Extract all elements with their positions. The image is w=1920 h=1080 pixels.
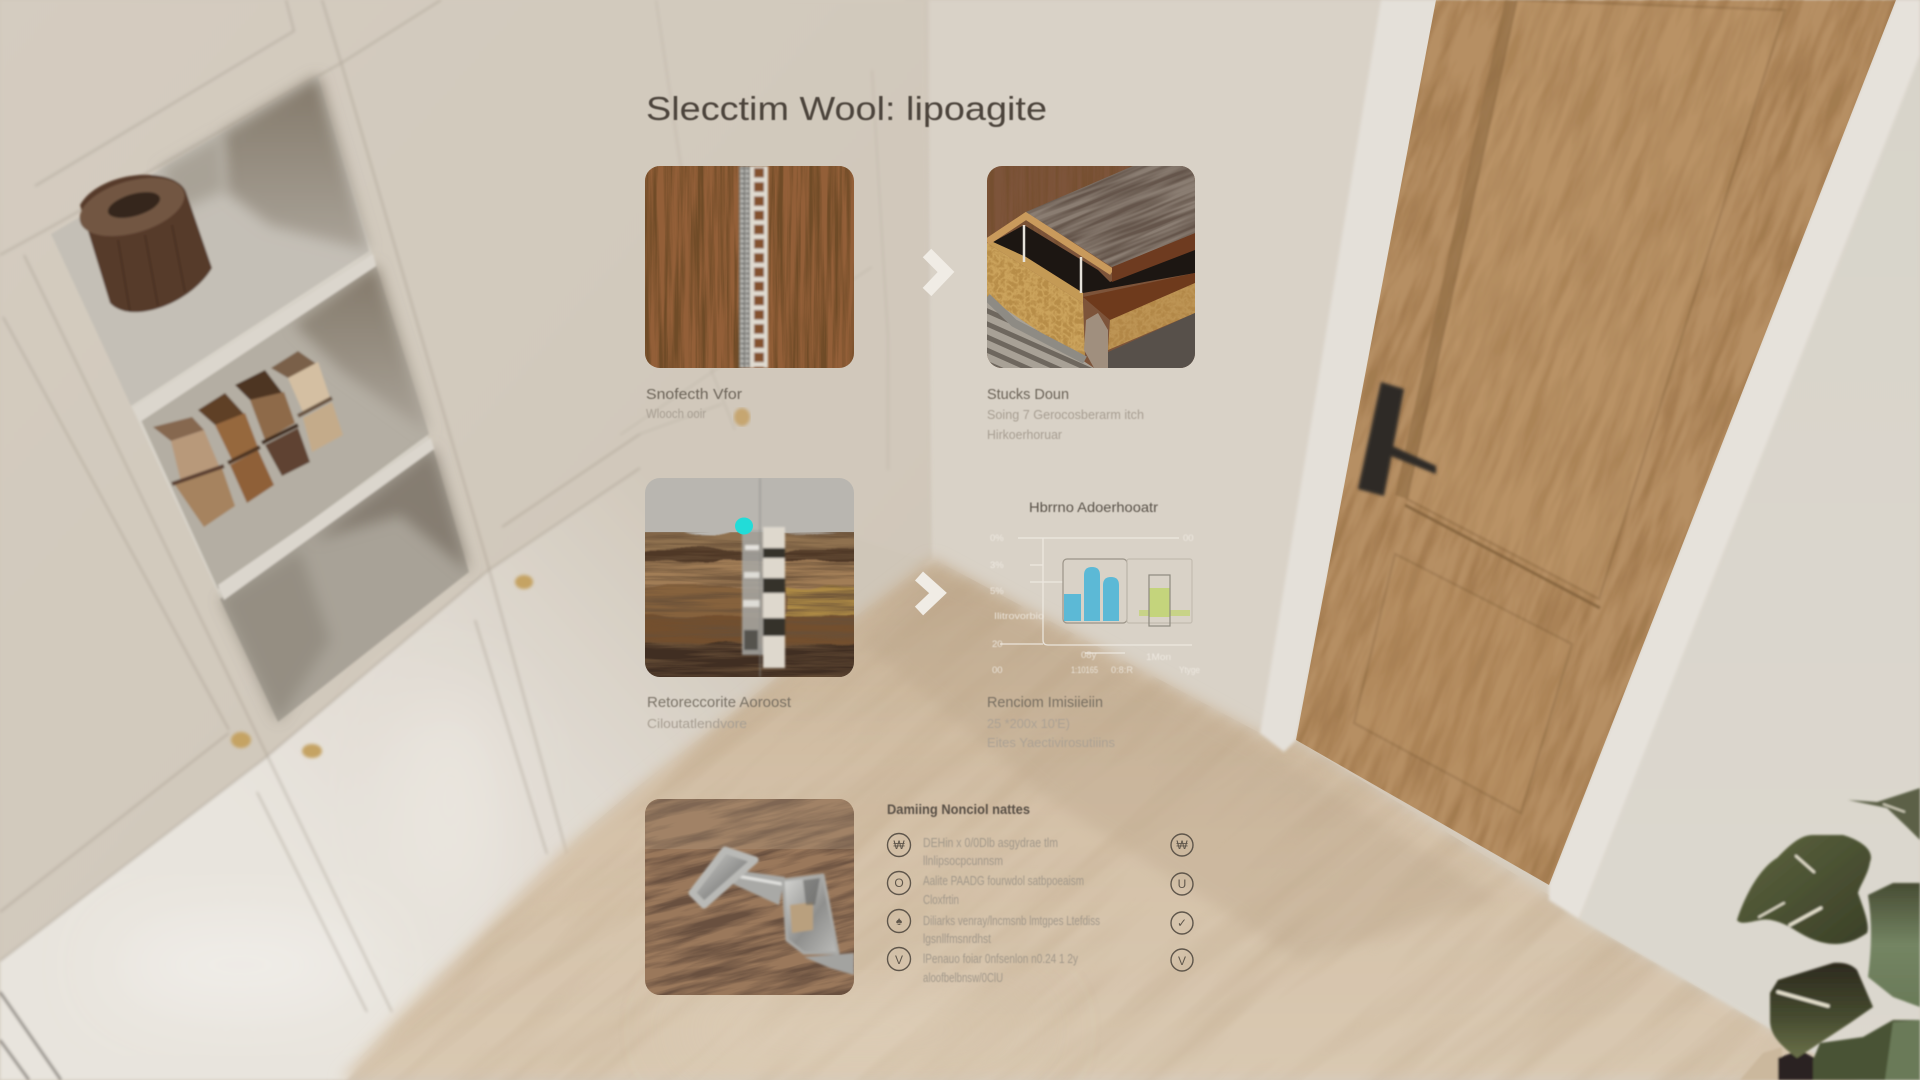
door upper panel [1407, 0, 1785, 599]
icons: right column: V [1178, 954, 1186, 968]
axis labels: 0% [990, 533, 1004, 544]
panel: wood strata with gauge [645, 478, 854, 677]
icons: left column [888, 834, 910, 970]
text: sample three caption [647, 695, 791, 731]
wooden door [1290, 0, 1900, 890]
text: list rows: lPenauo foiar 0nfsenlon n0.24 1 2y [923, 952, 1079, 966]
text: sample one caption: Wlooch ooir [646, 406, 707, 421]
icons: right column: U [1178, 877, 1186, 891]
arrow: second row [919, 576, 938, 611]
icon: potted plant [1737, 788, 1920, 1080]
wooden floor [340, 558, 1860, 1080]
arrow: first row [927, 253, 946, 292]
panel: layered cross section [987, 166, 1196, 368]
right wall [1579, 55, 1920, 1080]
text: list rows: Diliarks venray/lncmsnb lmtgpes Ltefdiss [923, 914, 1100, 928]
text: list rows [923, 836, 1100, 985]
chart panels [1063, 559, 1192, 623]
text: sample two caption: Soing 7 Gerocosberarm itch [987, 407, 1144, 422]
marker: cyan dot [735, 518, 753, 534]
middle compartment [141, 265, 429, 589]
text: chart caption: Eites Yaectivirosutiiins [987, 735, 1115, 750]
text: list rows: DEHin x 0/0Dlb asgydrae tlm [923, 836, 1058, 850]
text: sample three caption: Ciloutatlendvore [647, 716, 747, 731]
axis labels: Ilitrovorbio [994, 611, 1044, 622]
text: chart caption: 25 *200x 10'E) [987, 716, 1070, 731]
chart title: Hbrrno Adoerhooatr [1029, 499, 1158, 515]
axis labels: 3% [990, 560, 1004, 571]
icon: brass knob behind caption [734, 408, 750, 426]
icons: left column: O [894, 876, 904, 890]
icon: stacked wooden blocks [153, 351, 343, 527]
shelf boards [133, 254, 376, 422]
door trim [1260, 0, 1920, 919]
axis labels: 08y [1081, 650, 1097, 661]
text: sample two caption: Hirkoerhoruar [987, 427, 1063, 442]
bar chart [990, 533, 1200, 676]
text: list rows: lgsnllfmsnrdhst [923, 932, 991, 946]
icon: door handle [1358, 382, 1436, 496]
cabinet wall [0, 0, 932, 1080]
icons: brass cabinet knobs [231, 575, 533, 758]
axis labels: 00 [992, 665, 1003, 676]
shelf niche [51, 76, 469, 722]
icons: right column [1171, 834, 1193, 971]
text: list rows: aloofbelbnsw/0ClU [923, 971, 1003, 985]
icons: right column: ₩ [1176, 838, 1188, 852]
floor planks [1030, 730, 1170, 870]
bottom compartment [220, 448, 469, 722]
text: chart caption [987, 695, 1115, 750]
cabinet seams and panel grooves [0, 0, 640, 1012]
icon: wooden bowl [73, 167, 212, 312]
axis labels: 20 [992, 639, 1003, 650]
panel: metal hardware on wood [645, 799, 854, 995]
text: list rows: Cloxfrtin [923, 893, 959, 907]
top compartment [51, 76, 369, 406]
axis labels [990, 533, 1200, 676]
icons: left column: ₩ [893, 838, 905, 852]
icons: right column: ✓ [1177, 916, 1187, 930]
icons: left column: ♠ [896, 914, 903, 928]
blue bars [1064, 567, 1119, 621]
title: Slecctim Wool: lipoagite [646, 90, 1047, 127]
text: list rows: llnlipsocpcunnsm [923, 854, 1003, 868]
green indicator [1139, 575, 1190, 626]
text: sample three caption: Retoreccorite Aoroost [647, 695, 791, 711]
text: sample one caption: Snofecth Vfor [646, 387, 742, 403]
text: sample one caption [646, 387, 742, 421]
heading: list: Damiing Nonciol nattes [887, 801, 1030, 817]
text: sample two caption: Stucks Doun [987, 387, 1069, 403]
panel: wood sample with strip [645, 166, 854, 368]
text: chart caption: Renciom Imisiieiin [987, 695, 1103, 711]
door lower panel [1354, 554, 1572, 813]
floor shading [680, 570, 1500, 1060]
axis labels: 5% [990, 586, 1004, 597]
axis labels: Ytyge [1179, 665, 1200, 676]
axis labels: 1Mon [1146, 652, 1171, 663]
icons: left column: V [895, 953, 903, 967]
text: sample two caption [987, 387, 1144, 442]
axis labels: 00 [1183, 533, 1194, 544]
axis labels: 1:10165 [1071, 665, 1098, 676]
axis labels: 0:8:R [1111, 665, 1133, 676]
text: list rows: Aalite PAADG fourwdol satbpoeaism [923, 874, 1084, 888]
list: notes with icons [888, 834, 1193, 985]
